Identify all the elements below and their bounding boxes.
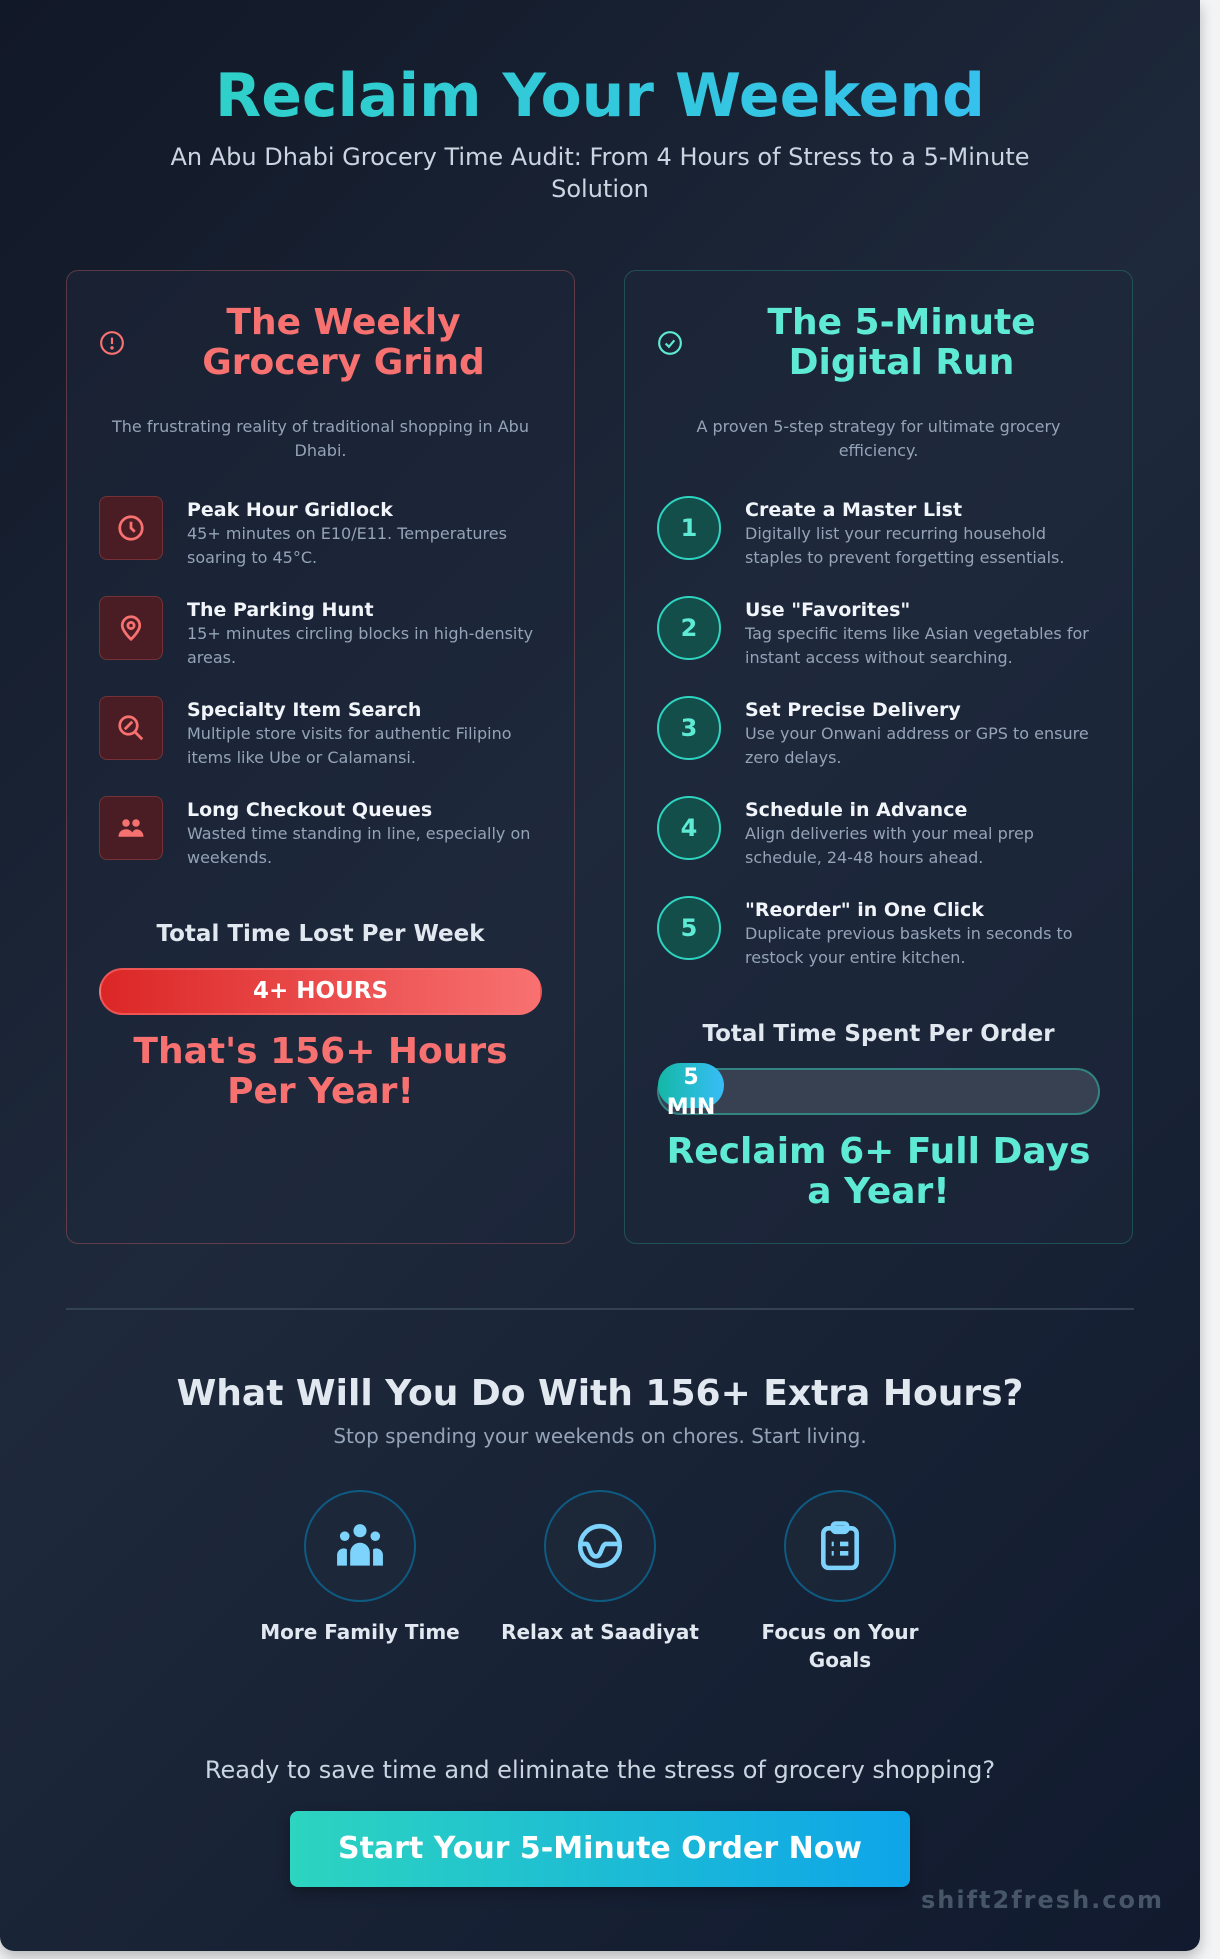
step 3: Set Precise Delivery [745, 699, 961, 721]
subtitle: An Abu Dhabi Grocery Time Audit: From 4 Hours of Stress to a 5-Minute Solution [170, 143, 1030, 203]
item: specialty search: Specialty Item Search [187, 699, 421, 721]
callout: reclaim 6 days: Reclaim 6+ Full Days a Year! [667, 1131, 1090, 1212]
total label: Total Time Spent Per Order [702, 1021, 1055, 1047]
label: family: More Family Time [260, 1620, 460, 1644]
step 2: 2 [681, 614, 697, 642]
item: peak hour gridlock: Peak Hour Gridlock [187, 499, 393, 521]
step 5: Duplicate previous baskets in seconds to restock your entire kitchen. [745, 924, 1073, 967]
step 5 [657, 896, 1073, 967]
step 4 [657, 796, 1034, 867]
item: peak hour gridlock [99, 496, 507, 567]
step 5: 5 [681, 914, 697, 942]
step 1: Digitally list your recurring household staples to prevent forgetting essentials. [745, 524, 1064, 567]
bar: 5 min: 5 [683, 1065, 699, 1090]
step 3: 3 [681, 714, 697, 742]
label: goals: Focus on Your Goals [762, 1620, 918, 1672]
item: checkout queues [99, 796, 530, 867]
step 4: Align deliveries with your meal prep schedule, 24-48 hours ahead. [745, 824, 1034, 867]
bar: 5 min [657, 1068, 1100, 1115]
icon: beach [544, 1490, 656, 1602]
step 4: Schedule in Advance [745, 799, 967, 821]
CTA text: Ready to save time and eliminate the stress of grocery shopping? [205, 1756, 995, 1784]
panel heading: digital run: The 5-Minute Digital Run [767, 302, 1036, 383]
item: specialty search: Multiple store visits for authentic Filipino items like Ube or Calamansi. [187, 724, 512, 767]
step 2: Use "Favorites" [745, 599, 910, 621]
step 1 [657, 496, 1064, 567]
watermark: shift2fresh.com [921, 1886, 1164, 1914]
total label: Total Time Lost Per Week [156, 921, 484, 947]
section subtitle: Stop spending your weekends on chores. Start living. [333, 1424, 867, 1448]
icon: check [658, 331, 682, 355]
step 3 [657, 696, 1089, 767]
title [0, 56, 1200, 136]
step 1: 1 [681, 514, 697, 542]
panel: 5-minute digital run [624, 270, 1133, 1244]
step 3: Use your Onwani address or GPS to ensure zero delays. [745, 724, 1089, 767]
step 1: Create a Master List [745, 499, 962, 521]
item: parking hunt [99, 596, 533, 667]
callout: 156 hours: That's 156+ Hours Per Year! [133, 1031, 508, 1112]
step 4: 4 [681, 814, 697, 842]
CTA button [290, 1811, 910, 1887]
panel: weekly grocery grind [66, 270, 575, 1244]
bar: 4+ hours [99, 968, 542, 1015]
CTA button: Start Your 5-Minute Order Now [338, 1831, 862, 1866]
icon: family [304, 1490, 416, 1602]
item: peak hour gridlock: 45+ minutes on E10/E11. Temperatures soaring to 45°C. [187, 524, 507, 567]
label: saadiyat: Relax at Saadiyat [501, 1620, 699, 1644]
bar: 4+ hours: 4+ HOURS [253, 978, 388, 1004]
panel description: A proven 5-step strategy for ultimate grocery efficiency. [696, 417, 1061, 460]
title: Reclaim Your Weekend [215, 61, 985, 131]
item: specialty search [99, 696, 512, 767]
step 2: Tag specific items like Asian vegetables for instant access without searching. [745, 624, 1089, 667]
icon: clipboard [784, 1490, 896, 1602]
icon: alert [100, 331, 124, 355]
step 2 [657, 596, 1089, 667]
panel heading: grind: The Weekly Grocery Grind [202, 302, 485, 383]
item: parking hunt: The Parking Hunt [187, 599, 374, 621]
bar: 5 min: MIN [667, 1095, 715, 1120]
item: checkout queues: Long Checkout Queues [187, 799, 432, 821]
panel description: The frustrating reality of traditional shopping in Abu Dhabi. [112, 417, 529, 460]
section heading: What Will You Do With 156+ Extra Hours? [177, 1373, 1023, 1414]
item: checkout queues: Wasted time standing in line, especially on weekends. [187, 824, 530, 867]
step 5: "Reorder" in One Click [745, 899, 984, 921]
item: parking hunt: 15+ minutes circling blocks in high-density areas. [187, 624, 533, 667]
